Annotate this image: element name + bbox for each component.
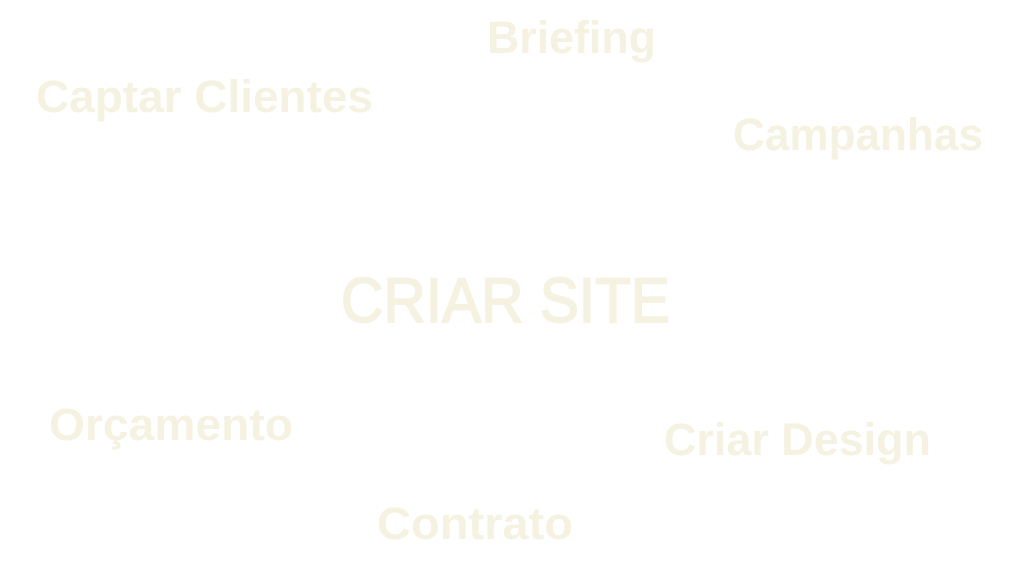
- node: Criar Design: Criar Design: [664, 414, 931, 465]
- node: Captar Clientes: Captar Clientes: [36, 71, 373, 122]
- node: Briefing: Briefing: [487, 12, 656, 63]
- node: Campanhas: Campanhas: [733, 109, 983, 160]
- central title: CRIAR SITE: CRIAR SITE: [341, 266, 670, 336]
- node: Contrato: Contrato: [377, 498, 573, 549]
- node: Orçamento: Orçamento: [49, 399, 293, 450]
